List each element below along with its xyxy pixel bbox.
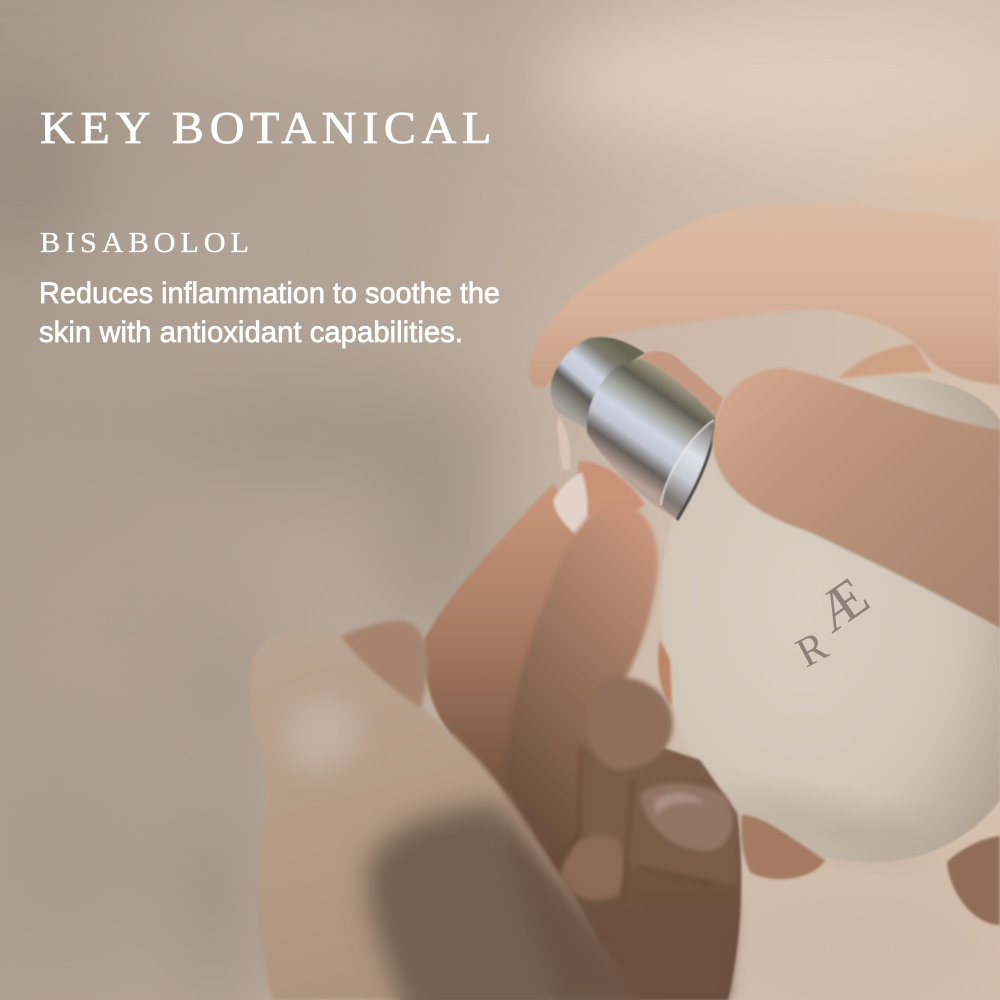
highlight on the palm [270,684,374,786]
thumb on bottle [712,368,1000,628]
palm [250,630,640,1000]
finger creases [557,747,713,897]
description text: skin with antioxidant capabilities. [39,316,463,349]
lower hand thumb tip and spray mist [578,462,645,530]
middle finger highlight [838,344,932,378]
subheading: BISABOLOL [40,228,249,259]
shadow blending palm into the hand [505,825,650,1000]
middle finger of lower hand [505,505,658,873]
back fingers on the right [741,815,825,879]
thumb tip of lower hand [340,621,428,712]
fingernail [553,472,588,537]
bottle monogram: R [789,623,835,677]
description text [39,277,500,349]
upper index finger [528,204,1000,388]
bottle body [661,377,1000,864]
right side of the hand into the wrist [590,900,735,1000]
bottle monogram [789,565,880,677]
cap upper tier [551,337,645,430]
bottle monogram: Æ [804,565,880,645]
description text: Reduces inflammation to soothe the [39,277,500,310]
cap lower tier [587,358,716,520]
silver cap [551,337,723,520]
lower hand dark mass [400,700,741,1000]
cap reflection of finger [640,351,723,418]
cap end ring [660,418,716,520]
index finger of lower hand [424,483,590,800]
curled finger segments [560,677,737,901]
photo: hands holding perfume bottle [250,204,1000,1000]
title: KEY BOTANICAL [40,103,492,154]
shadow on the palm [368,803,660,1000]
